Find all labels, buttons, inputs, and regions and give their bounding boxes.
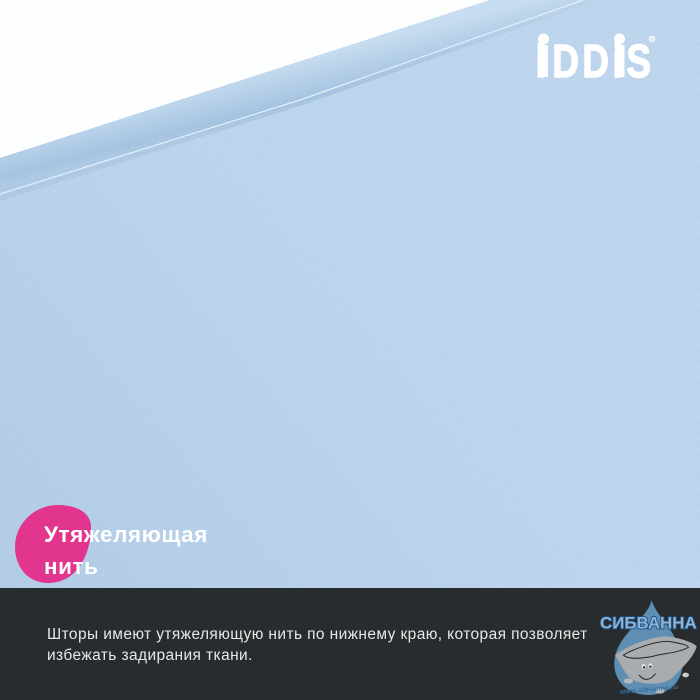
- icon: water drop: [614, 600, 683, 695]
- heading: [44, 522, 208, 579]
- icon: bathtub: [615, 636, 697, 694]
- description text: Шторы имеют утяжеляющую нить по нижнему краю, которая позволяет: [47, 626, 588, 642]
- pink accent blob: [15, 505, 91, 583]
- heading: Утяжеляющая: [44, 522, 208, 547]
- heading: нить: [44, 554, 98, 579]
- watermark name: СИБВАННА: [600, 613, 697, 632]
- description text: избежать задирания ткани.: [47, 646, 253, 664]
- description text: [47, 626, 588, 664]
- bottom panel: description: [0, 588, 700, 700]
- watermark: Сибванна bathtub drop logo: [600, 600, 698, 696]
- watermark url: www.sibvanna.ru: [619, 684, 678, 696]
